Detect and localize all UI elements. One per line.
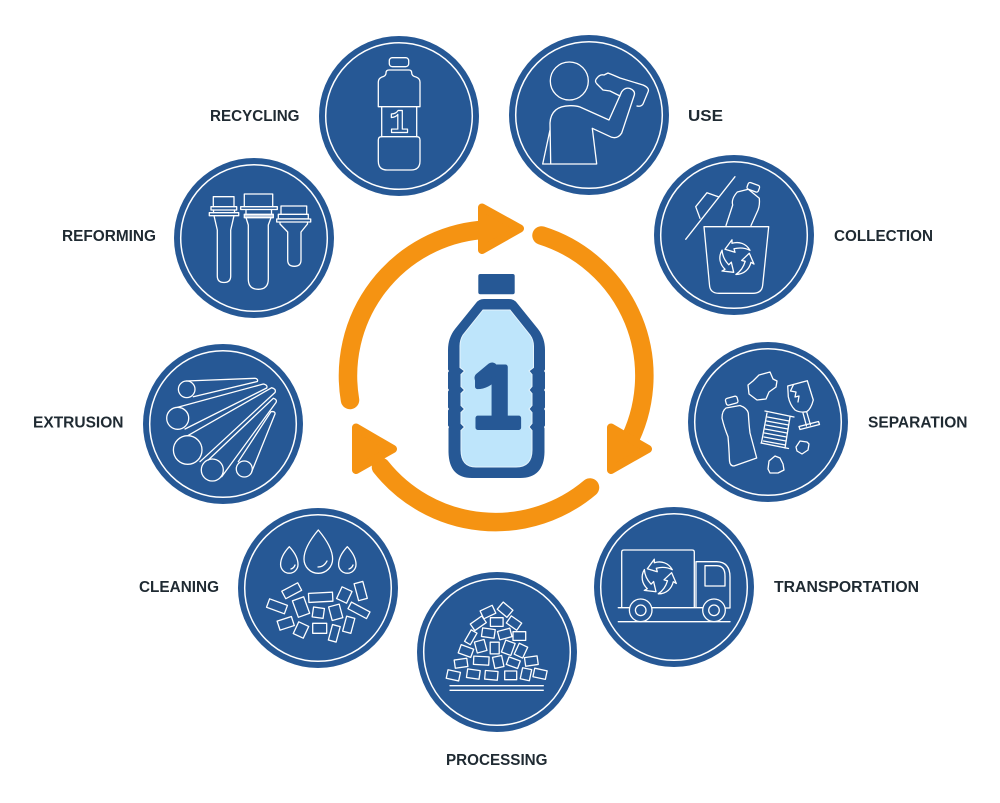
bottle body — [448, 299, 545, 478]
bottle liquid — [460, 310, 534, 467]
icon: preforms — [209, 194, 311, 289]
icon: recycled bottle — [378, 58, 420, 170]
label: separation: SEPARATION — [868, 414, 968, 432]
icon: person drinking — [543, 62, 648, 164]
panel: transportation — [594, 507, 754, 667]
panel: cleaning — [238, 508, 398, 668]
icon: flake pile — [446, 602, 547, 690]
circular arrows — [348, 208, 648, 522]
icon: sorted waste — [722, 372, 820, 473]
label: cleaning: CLEANING — [139, 579, 219, 596]
central bottle — [448, 274, 545, 478]
panel: use — [509, 35, 669, 195]
icon: water drops and flakes — [267, 530, 370, 642]
label: collection: COLLECTION — [834, 228, 933, 245]
label: recycling: RECYCLING — [210, 108, 300, 125]
panel: extrusion — [143, 344, 303, 504]
panel: recycling — [319, 36, 479, 196]
icon: extruded tubes — [167, 378, 276, 481]
icon: recycling bin — [686, 177, 769, 293]
panel: reforming — [174, 158, 334, 318]
label: reforming: REFORMING — [62, 228, 156, 245]
label: use: USE — [688, 108, 723, 125]
bottle number: 1 — [472, 350, 522, 456]
panel: processing — [417, 572, 577, 732]
icon: recycling truck — [618, 550, 730, 622]
panel: separation — [688, 342, 848, 502]
arrow: top-left arc — [348, 208, 520, 400]
label: processing: PROCESSING — [446, 752, 548, 769]
arrow: bottom arc — [356, 428, 590, 522]
panel: collection — [654, 155, 814, 315]
bottle cap — [478, 274, 515, 294]
label: transportation: TRANSPORTATION — [774, 579, 919, 596]
icon: recycled bottle: 1 — [389, 106, 409, 142]
label: extrusion: EXTRUSION — [33, 414, 124, 432]
arrow: right arc — [542, 236, 648, 470]
